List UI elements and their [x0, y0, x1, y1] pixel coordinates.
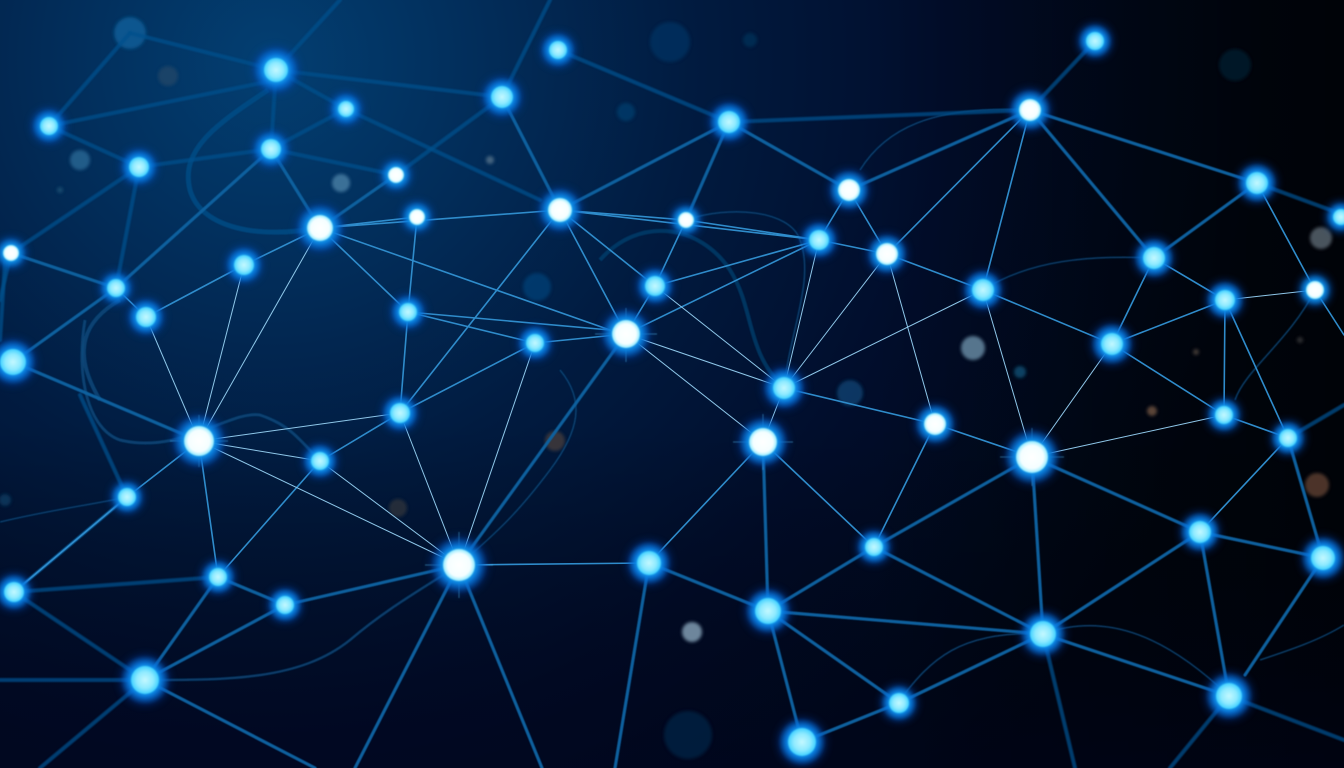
large white hub nodes — [0, 89, 1331, 594]
hairline bright edges — [146, 228, 1315, 565]
star flares on the brightest hubs — [170, 308, 1064, 598]
thin bright edges — [14, 110, 1344, 592]
faint background curves — [0, 90, 1344, 700]
